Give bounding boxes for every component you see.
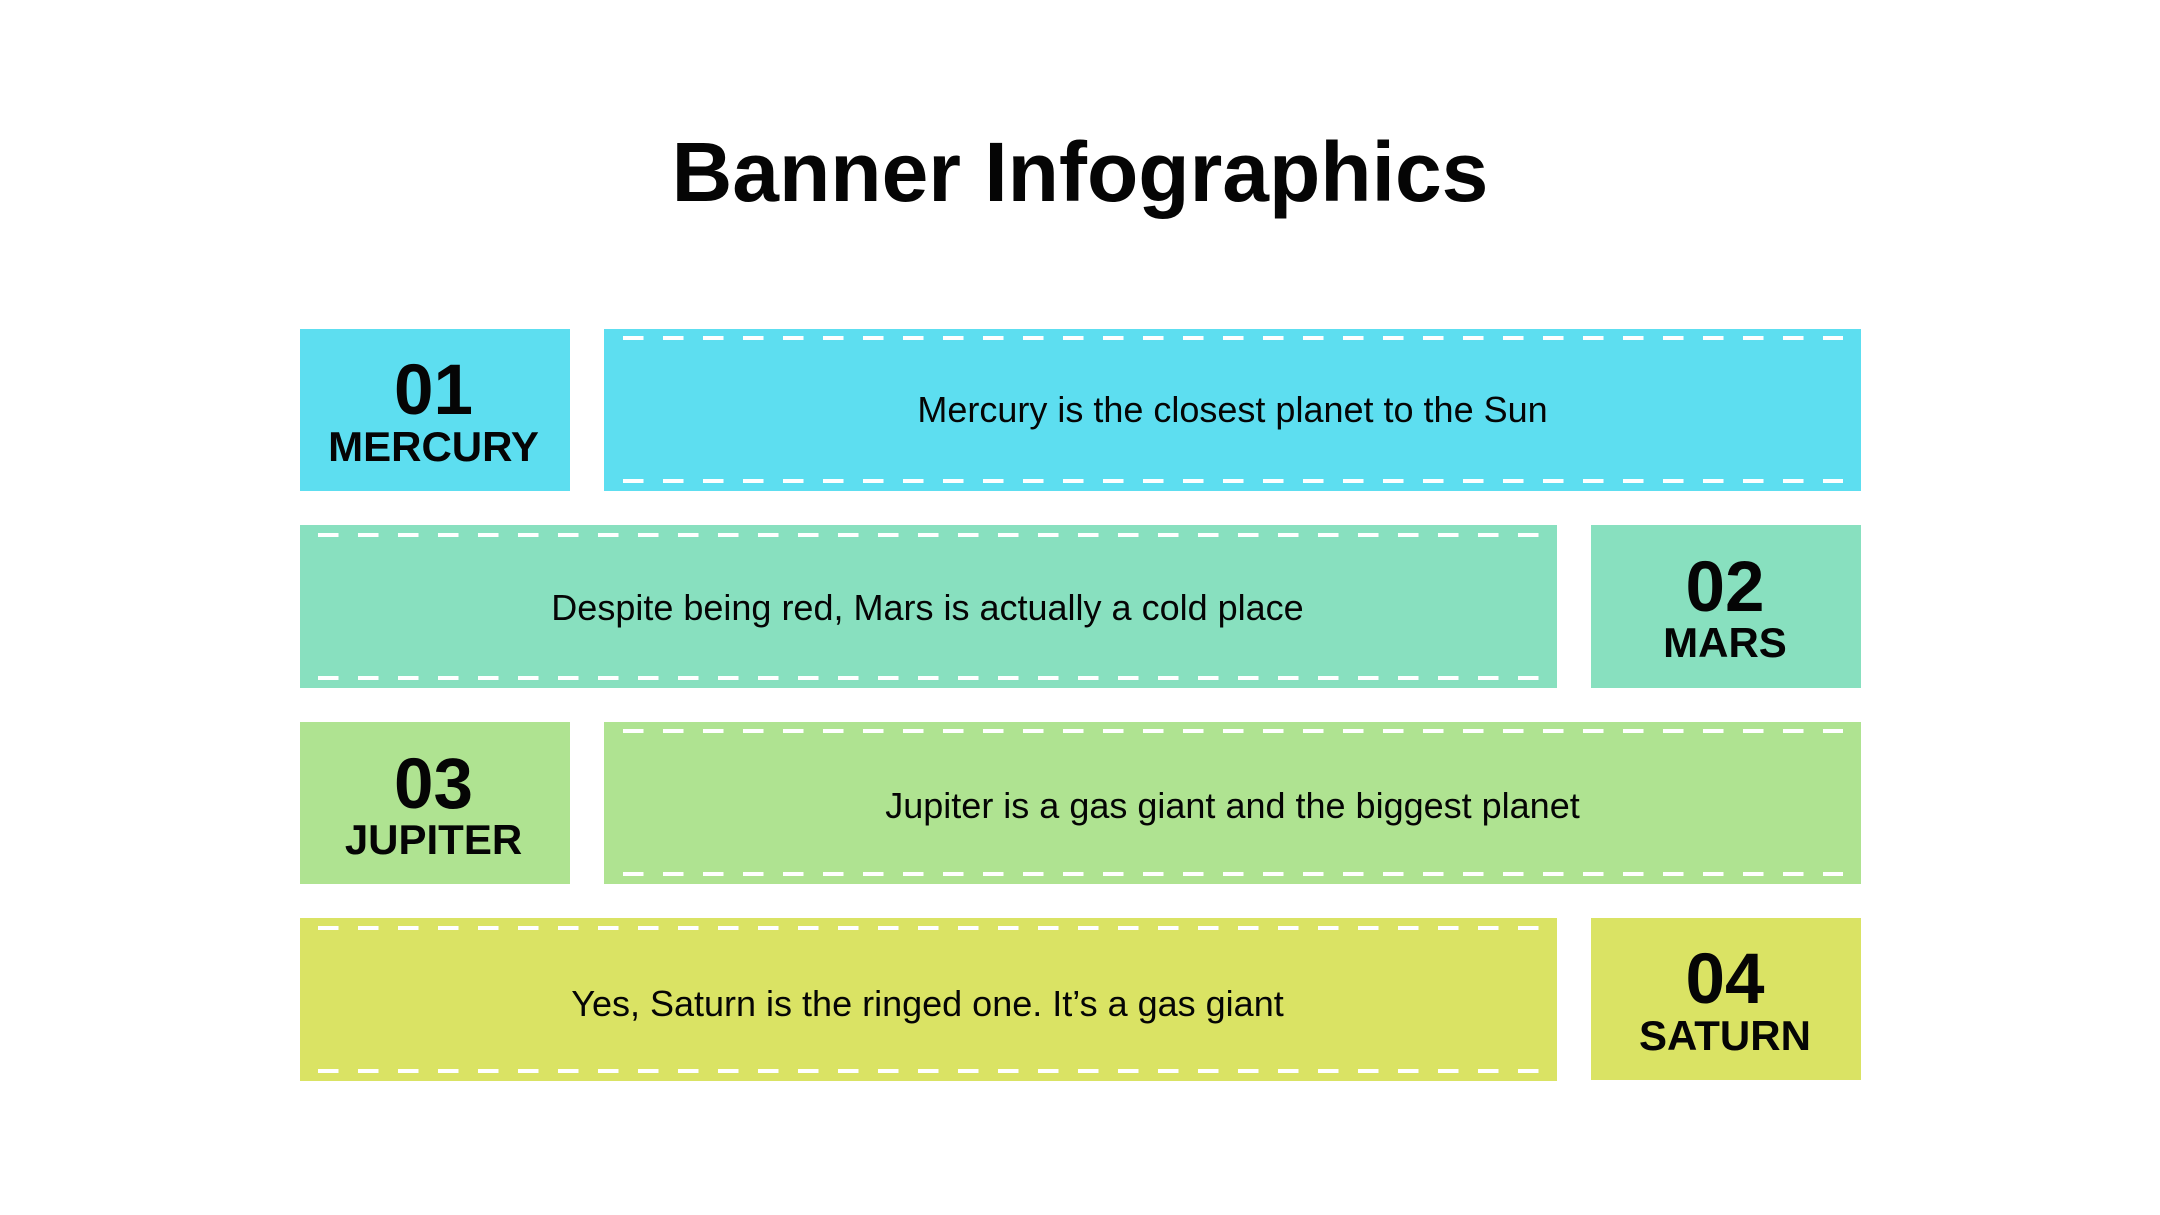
banner: Jupiter description xyxy=(604,722,1861,884)
label Saturn: SATURN xyxy=(1639,1012,1811,1059)
banner: Mercury description xyxy=(604,329,1861,491)
label panel: 04 Saturn xyxy=(1591,918,1861,1080)
number 02: 02 xyxy=(1686,548,1764,627)
label panel: 01 Mercury xyxy=(300,329,570,491)
number 03: 03 xyxy=(394,745,473,824)
text: Jupiter description: Jupiter is a gas giant and the biggest planet xyxy=(885,784,1580,826)
title: Banner Infographics xyxy=(672,125,1488,219)
label Mercury: MERCURY xyxy=(328,423,539,470)
banner: Saturn description xyxy=(300,918,1557,1081)
label panel: 02 Mars xyxy=(1591,525,1861,688)
text: Saturn description: Yes, Saturn is the ringed one. It’s a gas giant xyxy=(571,982,1284,1024)
label Jupiter: JUPITER xyxy=(345,816,522,863)
label Mars: MARS xyxy=(1663,619,1787,666)
number 01: 01 xyxy=(394,351,473,430)
text: Mars description: Despite being red, Mars is actually a cold place xyxy=(551,587,1304,628)
label panel: 03 Jupiter xyxy=(300,722,570,884)
number 04: 04 xyxy=(1686,940,1764,1019)
text: Mercury description: Mercury is the closest planet to the Sun xyxy=(917,389,1548,430)
banner: Mars description xyxy=(300,525,1557,688)
